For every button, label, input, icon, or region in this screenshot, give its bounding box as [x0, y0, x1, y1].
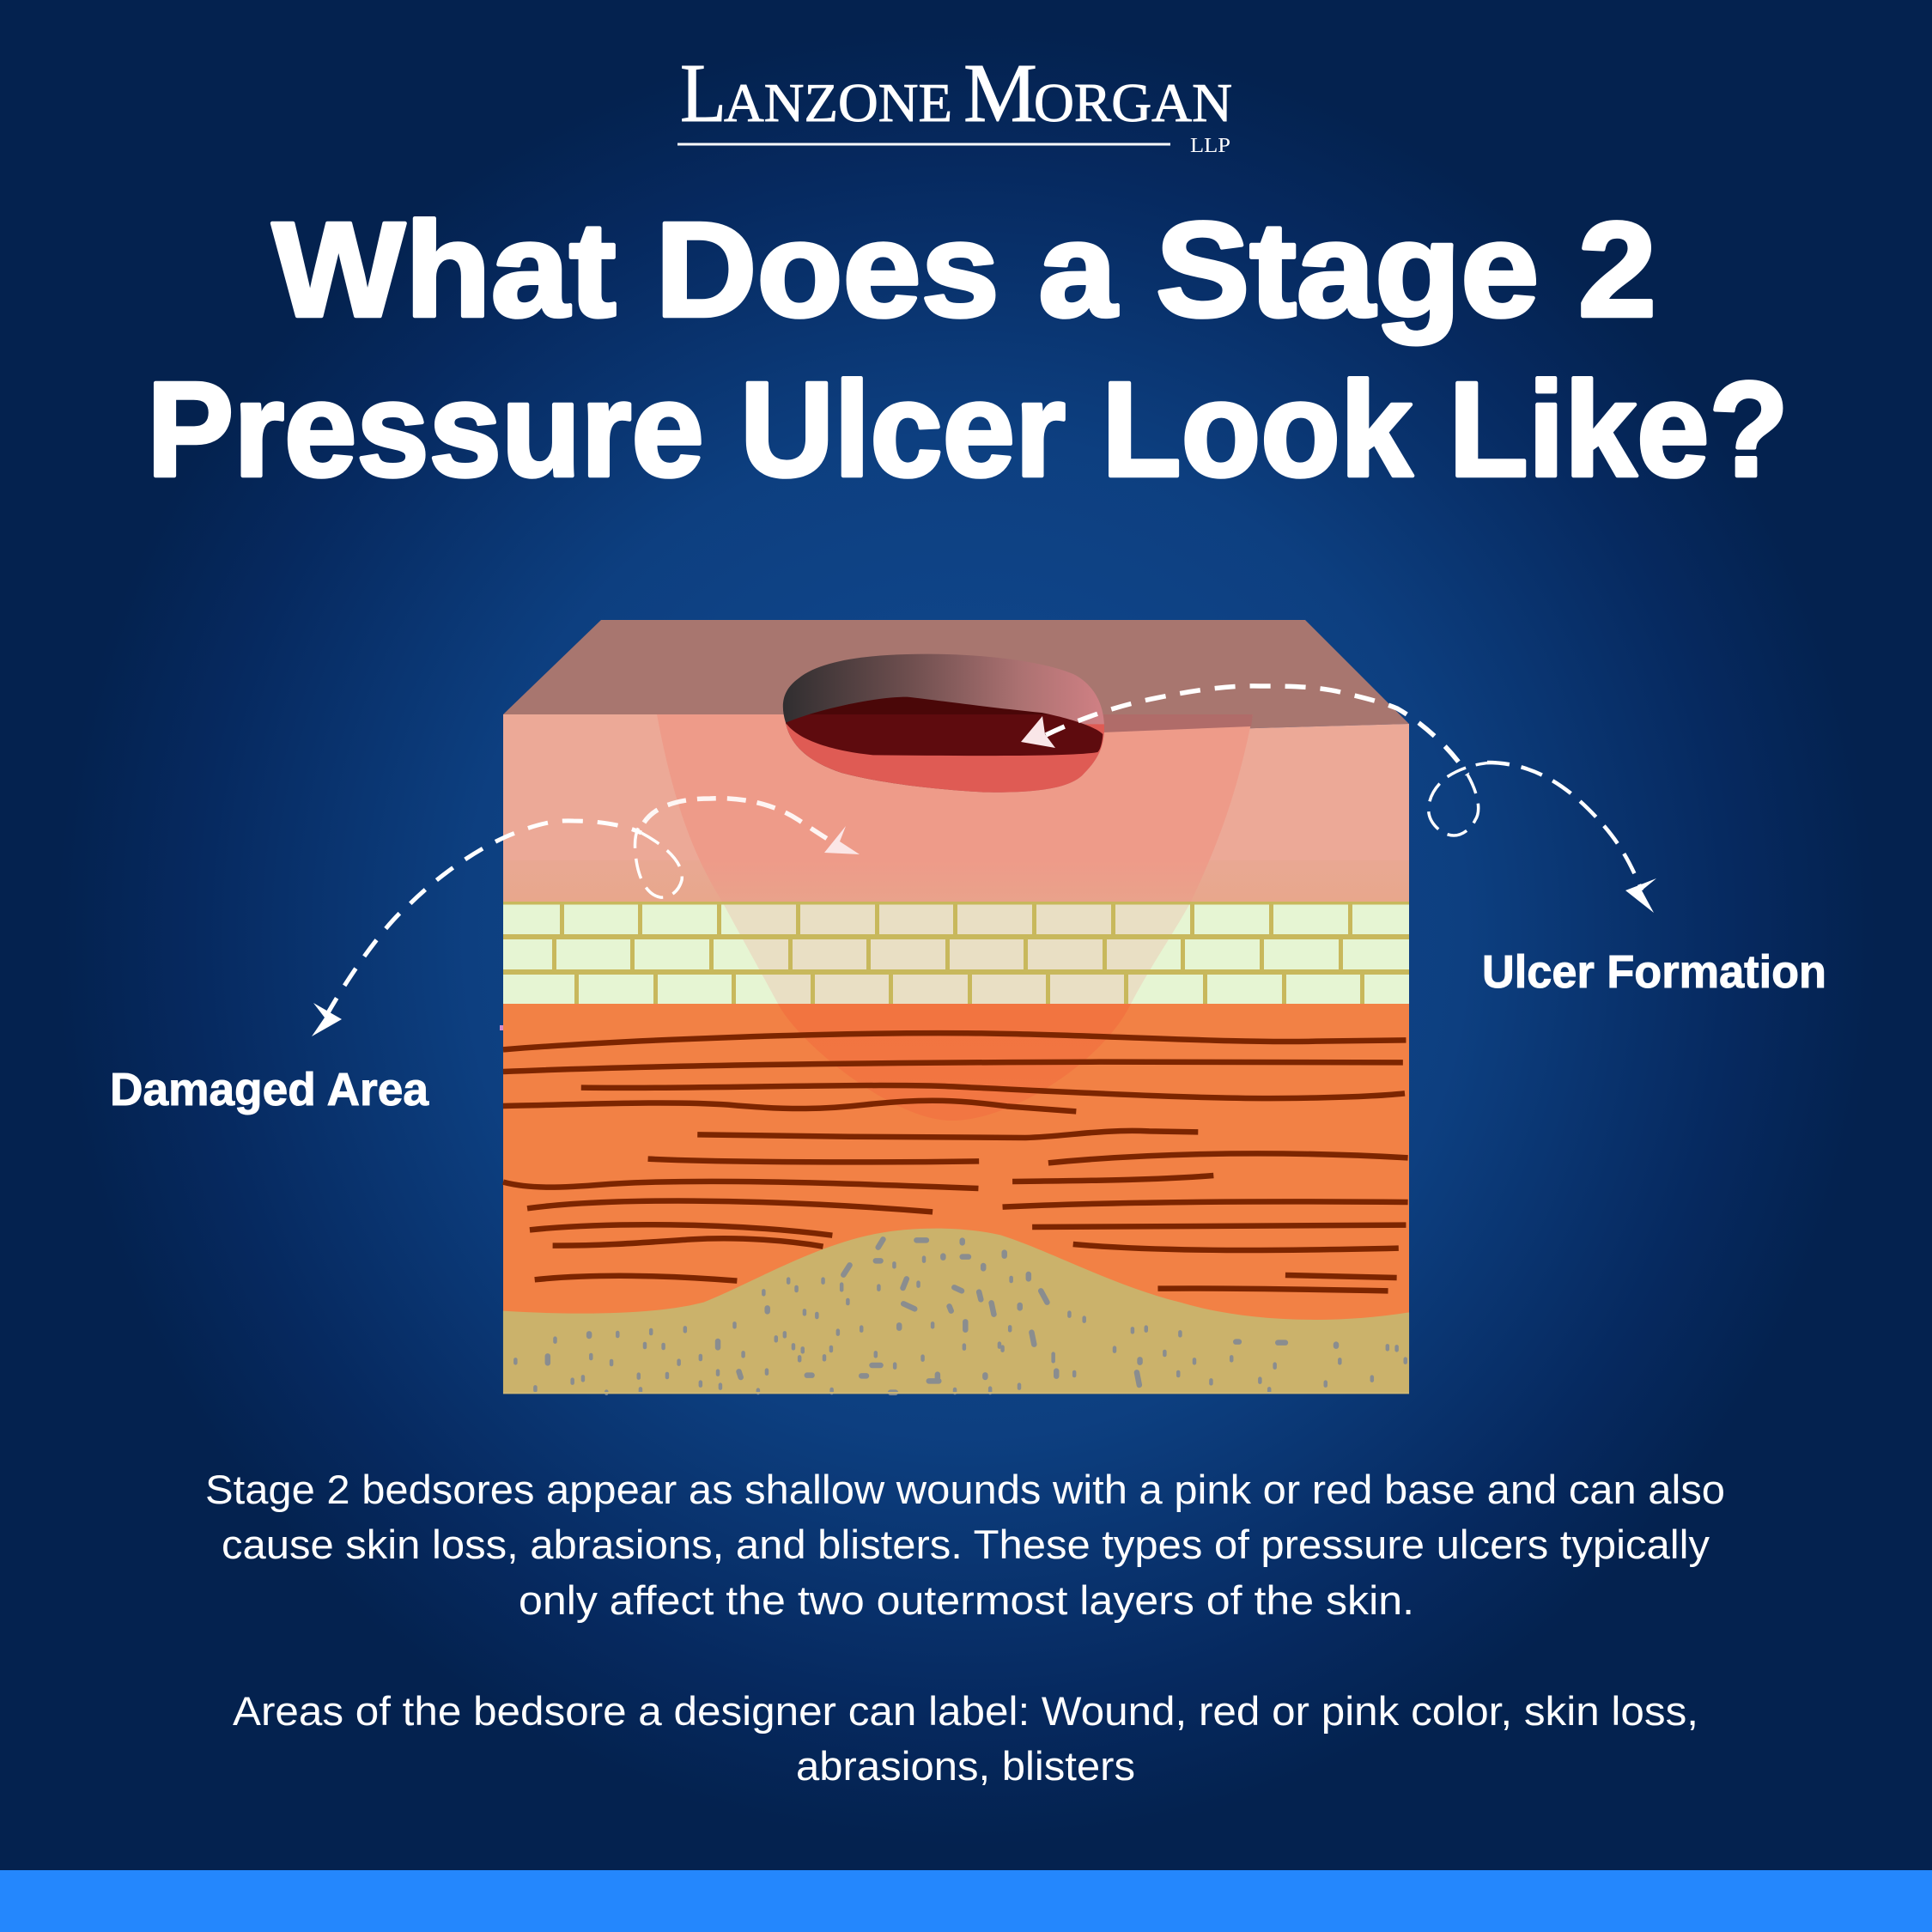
title: Pressure Ulcer Look Like? — [147, 355, 1789, 505]
logo: Lanzone Morgan LLP: ORGAN — [1034, 73, 1232, 133]
designer note text — [233, 1688, 1698, 1789]
description text — [205, 1467, 1725, 1623]
designer note text: Areas of the bedsore a designer can label: Wound, red or pink color, skin loss, — [233, 1688, 1698, 1734]
bottom bar — [0, 1870, 1932, 1932]
arrow: ulcer formation — [1021, 686, 1656, 913]
logo: Lanzone Morgan LLP: ANZONE — [724, 73, 952, 133]
arrow: damaged area — [312, 799, 860, 1036]
logo: Lanzone Morgan LLP — [677, 47, 1232, 157]
cell layer grid lines — [503, 902, 1409, 1004]
small layer marker — [500, 1025, 503, 1030]
description text: Stage 2 bedsores appear as shallow wounds with a pink or red base and can also — [205, 1467, 1725, 1512]
bottom edge of block — [503, 1392, 1409, 1394]
label: damaged area: Damaged Area — [110, 1064, 429, 1115]
arrowhead inside skin — [824, 826, 860, 854]
description text: cause skin loss, abrasions, and blisters. These types of pressure ulcers typically — [222, 1522, 1710, 1567]
logo: Lanzone Morgan LLP: M — [963, 47, 1037, 139]
arrowhead ulcer formation — [1625, 878, 1656, 913]
wound — [783, 654, 1104, 793]
designer note text: abrasions, blisters — [796, 1743, 1135, 1789]
skin top surface — [503, 620, 1409, 732]
wound rim — [783, 654, 1104, 793]
epidermis layer — [503, 714, 1409, 902]
title: What Does a Stage 2 — [272, 195, 1656, 345]
label: ulcer formation: Ulcer Formation — [1482, 946, 1826, 998]
skin cross-section diagram — [500, 620, 1409, 1394]
arrowhead into wound — [1021, 716, 1055, 748]
muscle layer — [503, 1004, 1409, 1364]
muscle fibers — [503, 1033, 1408, 1291]
damaged overlay on skin surface — [1103, 714, 1253, 732]
arrowhead damaged area — [312, 1003, 342, 1036]
dermal cell layer — [503, 902, 1409, 1004]
wound lower edge — [787, 724, 1104, 793]
bone and fat layer — [503, 1229, 1409, 1394]
description text: only affect the two outermost layers of the skin. — [519, 1577, 1414, 1623]
damaged area overlay — [657, 714, 1253, 1121]
logo: Lanzone Morgan LLP: LLP — [1190, 135, 1230, 157]
logo: Lanzone Morgan LLP: L — [680, 47, 726, 139]
wound crater — [786, 697, 1103, 756]
title — [147, 195, 1789, 505]
